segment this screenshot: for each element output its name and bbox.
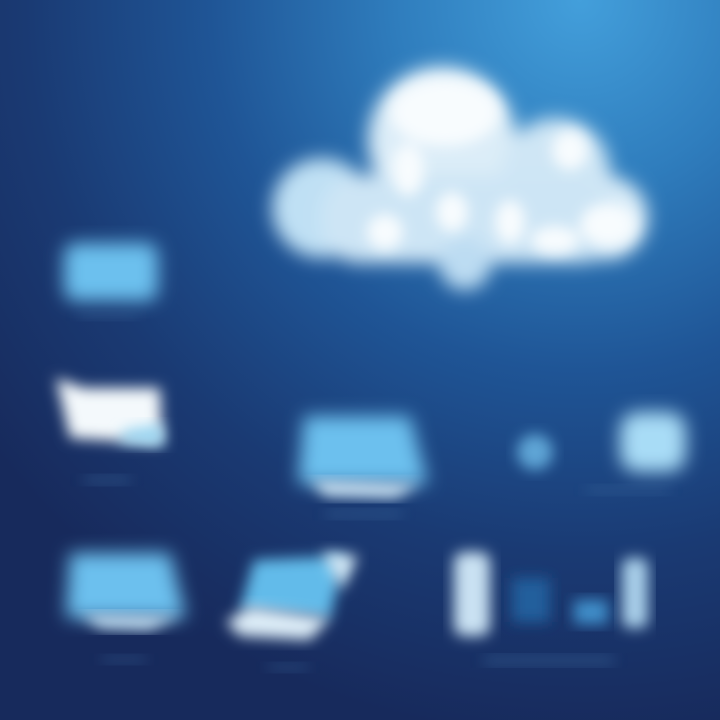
icon: centre screen <box>298 416 428 518</box>
icon: bar chart <box>454 552 648 665</box>
icon: top-left panel <box>64 243 158 319</box>
icon: tilted laptop <box>226 552 358 671</box>
icon: white tray <box>56 378 164 484</box>
icon: small dot and rounded square <box>517 412 686 494</box>
icon: bottom-left screen <box>66 553 186 663</box>
cloud <box>272 66 648 290</box>
